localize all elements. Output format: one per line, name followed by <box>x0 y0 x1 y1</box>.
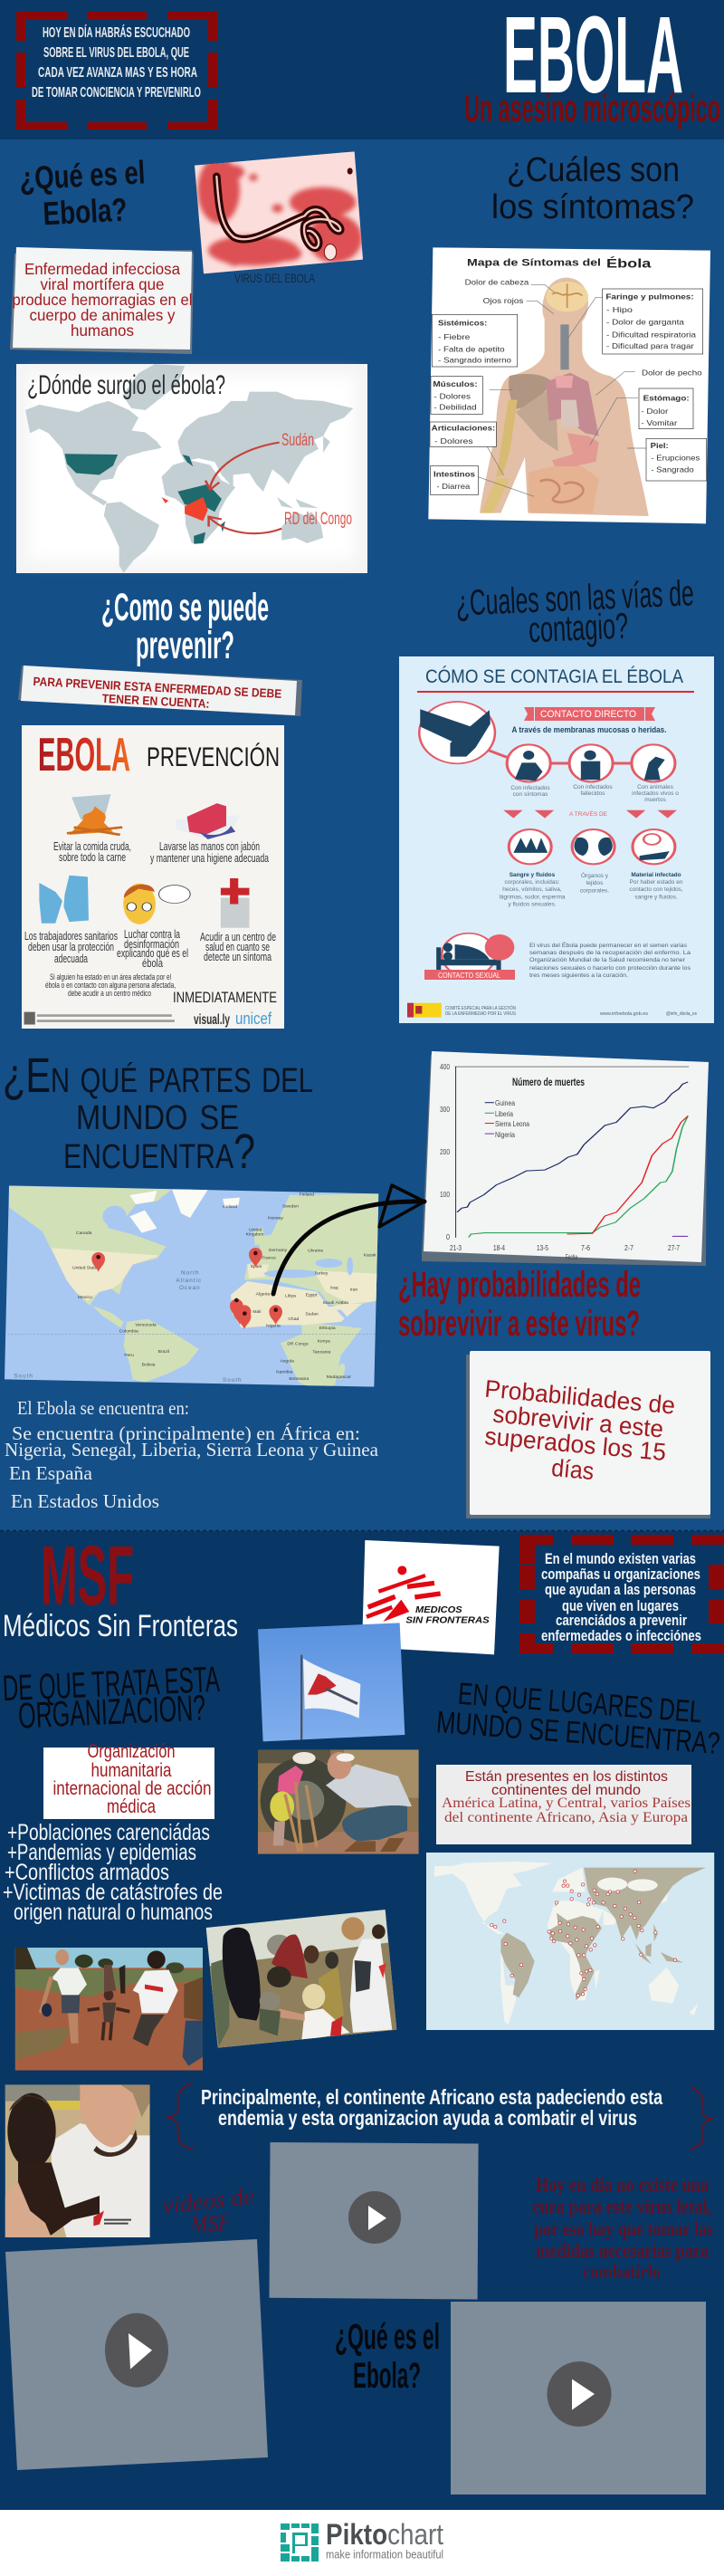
image: como se contagia el ebola: contacto con tejidos, <box>629 886 683 893</box>
chart: numero de muertes: 7-6 <box>581 1244 590 1252</box>
image: mapa de sintomas: Estómago: <box>643 394 690 403</box>
card: presencia por continentes: del continente Africano, Asia y Europa <box>444 1810 688 1825</box>
card: probabilidades de sobrevivir <box>466 1351 710 1518</box>
card: presencia por continentes: América Latina, y Central, varios Países <box>442 1796 691 1811</box>
brand: piktochart wordmark: make information beautiful <box>326 2548 443 2561</box>
right brace <box>691 2087 713 2149</box>
map: paises con ebola: Colombia <box>119 1328 138 1334</box>
icon: face with speech bubble <box>123 884 190 924</box>
chart: numero de muertes: 100 <box>440 1191 450 1199</box>
map: paises con ebola: DR Congo <box>287 1341 309 1346</box>
chart: numero de muertes: 400 <box>440 1063 450 1071</box>
map: paises con ebola: Norway <box>268 1216 283 1221</box>
heading: que es el ebola second: Ebola? <box>353 2356 421 2396</box>
card: organizacion humanitaria: Organización <box>87 1741 176 1762</box>
video placeholder 3 <box>451 2302 706 2495</box>
image: como se contagia el ebola: COMITÉ ESPECIAL PARA LA GESTIÓN <box>445 1005 516 1011</box>
chart: numero de muertes: 21-3 <box>450 1244 462 1252</box>
card: presencia por continentes <box>436 1765 691 1844</box>
image: mapa de sintomas: Mapa de Síntomas del <box>467 257 601 268</box>
image: como se contagia el ebola: corporales. <box>580 887 609 895</box>
card: probabilidades de sobrevivir: superados los 15 <box>483 1422 667 1466</box>
map: paises con ebola: Germany <box>269 1248 288 1253</box>
heading: que es el ebola second <box>335 2317 440 2396</box>
image: como se contagia el ebola: muertos <box>644 797 666 803</box>
image: mapa de sintomas: Intestinos <box>433 470 475 479</box>
map: paises con ebola: Ukraine <box>308 1249 323 1254</box>
chart: numero de muertes: Liberia <box>495 1110 513 1118</box>
heading: en que partes del mundo se encuentra: ¿En qué partes del <box>3 1049 313 1103</box>
image: mapa de sintomas: - Dolor de garganta <box>606 317 684 326</box>
image: prevencion: ébola o en contacto con alguna persona afectada, <box>45 981 176 990</box>
image: como se contagia el ebola: Órganos y <box>581 871 609 879</box>
image: mapa de sintomas: Sistémicos: <box>438 318 487 327</box>
heading: cuales son los sintomas: ¿Cuáles son <box>507 151 680 189</box>
image: prevencion: visual.ly <box>194 1012 230 1028</box>
list: poblaciones atendidas: +Conflictos armados <box>5 1860 169 1885</box>
heading: de que trata esta organizacion: ORGANIZACION? <box>17 1689 206 1737</box>
image: mapa de sintomas: - Debilidad <box>433 402 477 411</box>
card: presencia por continentes: Están presentes en los distintos <box>465 1769 668 1785</box>
chart: numero de muertes: 13-5 <box>537 1244 548 1252</box>
heading: en que partes del mundo se encuentra: encuentra? <box>63 1125 255 1179</box>
icon: pot and fire <box>67 794 122 835</box>
card: organizacion humanitaria: internacional de acción <box>52 1778 212 1799</box>
list: poblaciones atendidas: +Pandemias y epidemias <box>7 1840 196 1865</box>
map: paises con ebola: Ethiopia <box>319 1326 336 1331</box>
image: prevencion: y mantener una higiene adecuada <box>150 851 270 865</box>
image: como se contagia el ebola: www.infoebola.gob.es <box>600 1011 649 1017</box>
image: como se contagia el ebola: Con infectados <box>510 785 550 791</box>
callout: organizaciones con marco rojo: carenciádos a prevenir <box>556 1613 687 1629</box>
icon: hospital with cross <box>221 878 250 928</box>
text: donde se encuentra el ebola: El Ebola se encuentra en: <box>17 1397 189 1419</box>
list: poblaciones atendidas: origen natural o humanos <box>14 1900 213 1925</box>
map: paises con ebola: Saudi Arabia <box>323 1300 348 1306</box>
map: paises con ebola: France <box>262 1256 276 1261</box>
intro callout with dashed red frame: DE TOMAR CONCIENCIA Y PREVENIRLO <box>32 85 201 101</box>
image: doctor and child photo <box>258 1749 419 1854</box>
image: prevencion: Lavarse las manos con jabón <box>159 839 260 853</box>
text: no existe cura <box>532 2173 713 2283</box>
line: nigeria <box>672 1235 688 1238</box>
image: prevencion: sobre todo la carne <box>59 850 126 864</box>
heading: MSF: MSF <box>41 1528 134 1623</box>
map: paises con ebola: Ocean <box>179 1285 201 1291</box>
map: paises con ebola: Venezuela <box>135 1323 157 1328</box>
image: como se contagia el ebola: tres meses siguientes a la curación. <box>529 972 628 979</box>
heading: que es el ebola <box>18 153 148 234</box>
image: como se contagia el ebola: tejidos <box>586 880 604 886</box>
text: donde se encuentra el ebola: En España <box>9 1462 93 1484</box>
image: mapa de sintomas: - Dolor <box>641 407 668 416</box>
image: prevencion: unicef <box>235 1010 272 1028</box>
chart: numero de muertes: Número de muertes <box>512 1077 585 1088</box>
image: mapa de sintomas: - Hipo <box>606 305 633 314</box>
image: prevencion: Luchar contra la <box>124 927 181 941</box>
image: prevencion: Evitar la comida cruda, <box>53 839 131 853</box>
text: donde se encuentra el ebola: Se encuentra (principalmente) en África en: <box>12 1422 360 1444</box>
card: organizacion humanitaria: médica <box>107 1796 156 1817</box>
left brace <box>167 2083 194 2150</box>
icon: piktochart logo <box>281 2523 319 2562</box>
callout: organizaciones con marco rojo: que viven en lugares <box>562 1598 679 1614</box>
image: prevencion: adecuada <box>54 952 88 965</box>
map: paises con ebola: Nigeria <box>266 1324 281 1329</box>
image: como se contagia el ebola: El virus del Ébola puede permanecer en el semen varias <box>529 941 688 949</box>
banner: para prevenir <box>18 666 302 716</box>
map: paises con ebola: United States <box>72 1265 100 1270</box>
banner: para prevenir: PARA PREVENIR ESTA ENFERMEDAD SE DEBE <box>33 675 282 701</box>
card: definicion del ebola: viral mortífera que <box>40 275 165 293</box>
heading: como se puede prevenir: prevenir? <box>136 624 234 667</box>
image: prevencion <box>22 725 284 1029</box>
map: paises con ebola: Spain <box>251 1264 262 1269</box>
background: header band <box>0 0 724 139</box>
image: prevencion: INMEDIATAMENTE <box>173 989 277 1006</box>
map: paises con ebola: Iraq <box>330 1285 338 1290</box>
map: paises con ebola: Botswana <box>289 1376 309 1382</box>
icon: bed <box>436 934 514 976</box>
image: mapa de sintomas: Faringe y pulmones: <box>605 292 694 302</box>
chart: numero de muertes: 200 <box>440 1148 450 1156</box>
flag <box>407 1003 442 1018</box>
map: paises con ebola: Mali <box>252 1309 261 1315</box>
image: prevencion: detecte un síntoma <box>204 950 272 963</box>
chart: numero de muertes <box>422 1051 709 1266</box>
intro callout with dashed red frame: HOY EN DÍA HABRÁS ESCUCHADO <box>43 25 190 41</box>
map: paises con ebola: Egypt <box>306 1292 318 1298</box>
image: como se contagia el ebola: @info_ébola_es <box>666 1011 697 1017</box>
image: como se contagia el ebola: Con animales <box>637 784 674 790</box>
map: paises con ebola: Sudan <box>305 1312 319 1317</box>
heading: vias de contagio: contagio? <box>528 606 629 650</box>
image: prevencion: desinformación <box>124 937 179 951</box>
card: probabilidades de sobrevivir: Probabilidades de <box>483 1375 676 1420</box>
chart: numero de muertes: 2-7 <box>624 1244 634 1252</box>
heading: que es el ebola: ¿Qué es el <box>18 153 146 197</box>
image: como se contagia el ebola: infectados vivos o <box>632 790 679 797</box>
map pins <box>91 1248 282 1329</box>
image: mapa de sintomas: - Dolores <box>434 436 473 445</box>
heading: como se puede prevenir <box>101 586 269 667</box>
map: paises con ebola: Algeria <box>256 1292 270 1298</box>
caption: virus del ebola: VIRUS DEL EBOLA <box>234 271 315 285</box>
image: mapa de sintomas: - Dolores <box>433 392 472 401</box>
banner: contacto directo: CONTACTO DIRECTO <box>540 709 636 720</box>
image: como se contagia el ebola: heces, vómitos, saliva, <box>502 886 562 893</box>
image: como se contagia el ebola: Con infectados <box>573 784 613 790</box>
map: paises con ebola: Mexico <box>78 1295 92 1300</box>
image: mapa de sintomas: - Sangrado interno <box>438 355 511 364</box>
banner: contacto sexual <box>424 970 515 980</box>
map: donde surgio el ebola <box>16 364 367 573</box>
image: mapa de sintomas: Dolor de pecho <box>642 368 702 377</box>
image: mapa de sintomas <box>428 247 710 523</box>
image: como se contagia el ebola: DE LA ENFERMEDAD POR EL VIRUS <box>445 1011 517 1017</box>
image: mapa de sintomas: Ojos rojos <box>483 296 524 305</box>
image: mapa de sintomas: - Fiebre <box>438 332 471 341</box>
map: paises con ebola: Turkey <box>314 1270 329 1276</box>
line: liberia <box>469 1116 688 1237</box>
map: paises con ebola <box>5 1185 378 1387</box>
image: mapa de sintomas: - Vomitar <box>641 418 677 427</box>
image: prevencion: deben usar la protección <box>28 940 114 953</box>
heading: medicos sin fronteras: Médicos Sin Fronteras <box>3 1609 238 1643</box>
map: paises con ebola: Libya <box>285 1294 296 1299</box>
card: definicion del ebola: cuerpo de animales y <box>29 306 176 324</box>
brand: piktochart wordmark: Piktochart <box>326 2518 443 2551</box>
video placeholder 2 <box>5 2239 268 2470</box>
chart: numero de muertes: 18-4 <box>493 1244 505 1252</box>
map: paises con ebola: Angola <box>280 1358 294 1364</box>
card: organizacion humanitaria: humanitaria <box>90 1760 172 1781</box>
image: prevencion: ébola <box>142 956 164 970</box>
heading: cuales son los sintomas <box>491 151 694 226</box>
card: probabilidades de sobrevivir: sobrevivir a este <box>491 1401 664 1443</box>
background: footer <box>0 2510 724 2576</box>
banner: para prevenir: TENER EN CUENTA: <box>101 692 210 711</box>
map: paises con ebola: Brazil <box>158 1349 169 1355</box>
image: prevencion: salud en cuanto se <box>205 940 270 953</box>
map: paises con ebola: Iceland <box>223 1204 237 1210</box>
image: mapa de sintomas: Articulaciones: <box>432 424 495 433</box>
heading: vias de contagio <box>455 573 696 654</box>
line: sierra leona <box>567 1116 688 1234</box>
intro callout with dashed red frame <box>16 12 217 129</box>
image: prevencion: explicando qué es el <box>117 946 188 960</box>
image: MSF flag <box>258 1623 405 1741</box>
dots <box>503 810 677 819</box>
map: paises con ebola: Iran <box>350 1287 357 1292</box>
list: poblaciones atendidas <box>3 1820 223 1925</box>
heading: en que partes del mundo se encuentra: mundo se <box>76 1086 239 1140</box>
prevencion title: PREVENCIÓN <box>147 742 280 772</box>
banner: contacto directo <box>524 707 655 721</box>
image: mapa de sintomas: Dolor de cabeza <box>465 277 529 286</box>
map: donde surgio el ebola: ¿Dónde surgio el ébola? <box>27 370 225 400</box>
callout: organizaciones con marco rojo <box>519 1535 724 1653</box>
image: como se contagia el ebola: Material infectado <box>631 872 681 878</box>
chart: numero de muertes: 300 <box>440 1106 450 1114</box>
image: como se contagia el ebola: A través de membranas mucosas o heridas. <box>512 725 666 735</box>
icons: direct contact circles <box>507 744 675 782</box>
chart: numero de muertes: Sierra Leona <box>495 1120 529 1128</box>
video placeholder 1 <box>270 2142 479 2300</box>
map: paises con ebola: Sweden <box>282 1203 299 1209</box>
arrow: map to chart <box>273 1185 424 1294</box>
image: baby photo <box>5 2084 150 2237</box>
image: como se contagia el ebola: corporales, incluidas: <box>504 879 560 886</box>
image: mapa de sintomas: - Dificultad respiratoria <box>606 330 696 339</box>
image: como se contagia el ebola: Por haber estado en <box>630 879 683 886</box>
image: mapa de sintomas: Piel: <box>651 441 669 450</box>
card: organizacion humanitaria <box>43 1741 214 1819</box>
background: MSF section <box>0 1531 724 2510</box>
image: como se contagia el ebola: con síntomas <box>513 791 548 798</box>
card: presencia por continentes: continentes del mundo <box>491 1783 641 1798</box>
heading: que es el ebola second: ¿Qué es el <box>335 2317 440 2357</box>
map: paises con ebola: United <box>249 1227 262 1232</box>
image: MSF logo: SIN FRONTERAS <box>405 1616 490 1626</box>
map: paises con ebola: Chad <box>288 1317 299 1322</box>
heading: hay probabilidades de sobrevivir <box>398 1265 641 1344</box>
image: como se contagia el ebola: A TRAVÉS DE <box>569 809 608 818</box>
image: como se contagia el ebola: Sangre y fluidos <box>510 872 556 878</box>
label: videos de MSF <box>161 2182 255 2237</box>
list: poblaciones atendidas: +Poblaciones carenciádas <box>7 1820 210 1845</box>
image: virus photo <box>195 151 363 273</box>
image: mapa de sintomas: - Dificultad para tragar <box>606 341 694 350</box>
image: como se contagia el ebola: lágrimas, sudor, esperma <box>500 895 566 900</box>
map: paises con ebola: Namibia <box>276 1370 293 1375</box>
chart: numero de muertes: 27-7 <box>668 1244 680 1252</box>
map: paises con ebola: Bolivia <box>142 1363 156 1368</box>
icons: transmission circles <box>509 829 675 864</box>
image: mapa de sintomas: Ébola <box>606 256 652 271</box>
image: prevencion: Los trabajadores sanitarios <box>24 929 118 943</box>
chart: numero de muertes: Fecha <box>566 1253 577 1261</box>
chart: numero de muertes: Nigeria <box>495 1131 515 1139</box>
list: poblaciones atendidas: +Victimas de catástrofes de <box>3 1880 223 1905</box>
map: paises con ebola: Tanzania <box>312 1349 331 1355</box>
image: como se contagia el ebola <box>399 656 714 1023</box>
map: paises con ebola: Kazak <box>364 1252 376 1258</box>
icon: soap <box>176 803 240 839</box>
label: videos de MSF: MSF <box>189 2209 232 2237</box>
chart: numero de muertes: Guinea <box>495 1099 515 1107</box>
image: como se contagia el ebola: CÓMO SE CONTAGIA EL ÉBOLA <box>425 666 683 687</box>
heading: como se puede prevenir: ¿Como se puede <box>101 586 269 629</box>
image: walking photo <box>15 1948 203 2071</box>
map: paises con ebola: Canada <box>76 1231 92 1236</box>
map: paises con ebola: Finland <box>300 1192 314 1198</box>
map: paises con ebola: Kingdom <box>246 1232 263 1238</box>
heading: de que trata esta organizacion: DE QUE TRATA ESTA <box>2 1660 221 1709</box>
map: paises con ebola: Kenya <box>318 1339 330 1345</box>
image: MSF logo: MEDICOS <box>415 1605 462 1615</box>
card: definicion del ebola: produce hemorragias en el <box>13 291 192 309</box>
image: MSF logo <box>362 1540 500 1654</box>
image: prevencion: debe acudir a un centro médico <box>68 989 151 998</box>
map: donde surgio el ebola: Sudán <box>281 431 314 450</box>
map: presencia mundial de MSF <box>426 1853 714 2030</box>
icon: hands contact <box>419 702 495 763</box>
image: mapa de sintomas: Músculos: <box>433 379 478 388</box>
card: definicion del ebola: humanos <box>71 321 134 340</box>
chart: numero de muertes: 0 <box>446 1233 450 1241</box>
map: paises con ebola: South <box>223 1377 243 1384</box>
image: como se contagia el ebola: semanas después de la recuperación del enfermo. La <box>529 950 691 956</box>
text: donde se encuentra el ebola: En Estados Unidos <box>11 1490 159 1512</box>
map: paises con ebola: North <box>181 1269 199 1276</box>
image: como se contagia el ebola: relaciones sexuales o hacerlo con protección durante los <box>529 965 691 972</box>
icon: human body <box>480 278 649 516</box>
image: prevencion: Acudir a un centro de <box>200 930 276 943</box>
ebola logo: EBOLA <box>38 729 130 781</box>
image: como se contagia el ebola: fallecidos <box>580 790 605 797</box>
banner: contacto sexual: CONTACTO SEXUAL <box>438 972 500 980</box>
image: prevencion: Si alguien ha estado en un área afectada por el <box>50 972 171 982</box>
map: paises con ebola: Madagascar <box>327 1374 351 1380</box>
heading: cuales son los sintomas: los síntomas? <box>491 188 694 226</box>
image: como se contagia el ebola: sangre y fluidos. <box>634 895 678 900</box>
map: paises con ebola: Atlantic <box>176 1278 202 1284</box>
image: mapa de sintomas: - Falta de apetito <box>438 344 505 353</box>
label: videos de MSF: videos de <box>161 2182 255 2219</box>
intro callout with dashed red frame: CADA VEZ AVANZA MAS Y ES HORA <box>38 65 197 81</box>
text: donde se encuentra el ebola <box>5 1397 379 1512</box>
card: definicion del ebola: Enfermedad infecciosa <box>24 260 180 278</box>
image: group photo <box>202 1906 401 2051</box>
text: continente africano <box>201 2085 662 2130</box>
image: mapa de sintomas: - Sangrado <box>651 465 694 474</box>
image: mapa de sintomas: - Diarrea <box>436 482 471 491</box>
heading: en que lugares del mundo <box>435 1677 721 1761</box>
card: probabilidades de sobrevivir: días <box>550 1454 595 1485</box>
image: mapa de sintomas: - Erupciones <box>651 453 700 462</box>
heading: en que partes del mundo se encuentra <box>3 1049 313 1179</box>
text: no existe cura: combatirlo <box>583 2260 661 2283</box>
icon: gloves <box>39 876 89 924</box>
background: main ebola section <box>0 139 724 1531</box>
heading: de que trata esta organizacion <box>2 1660 222 1737</box>
intro callout with dashed red frame: SOBRE EL VIRUS DEL EBOLA, QUE <box>43 45 189 61</box>
map: donde surgio el ebola: RD del Congo <box>284 510 352 529</box>
line: guinea <box>457 1082 688 1212</box>
image: como se contagia el ebola: y fluidos sexuales. <box>508 902 557 907</box>
heading: que es el ebola: Ebola? <box>42 191 128 232</box>
card: definicion del ebola <box>10 247 194 354</box>
map: paises con ebola: South <box>14 1374 33 1380</box>
text: donde se encuentra el ebola: Nigeria, Senegal, Liberia, Sierra Leona y Guinea <box>5 1439 379 1460</box>
image: como se contagia el ebola: Organización Mundial de la Salud recomienda no tener <box>529 957 686 963</box>
map: paises con ebola: Peru <box>124 1353 134 1358</box>
